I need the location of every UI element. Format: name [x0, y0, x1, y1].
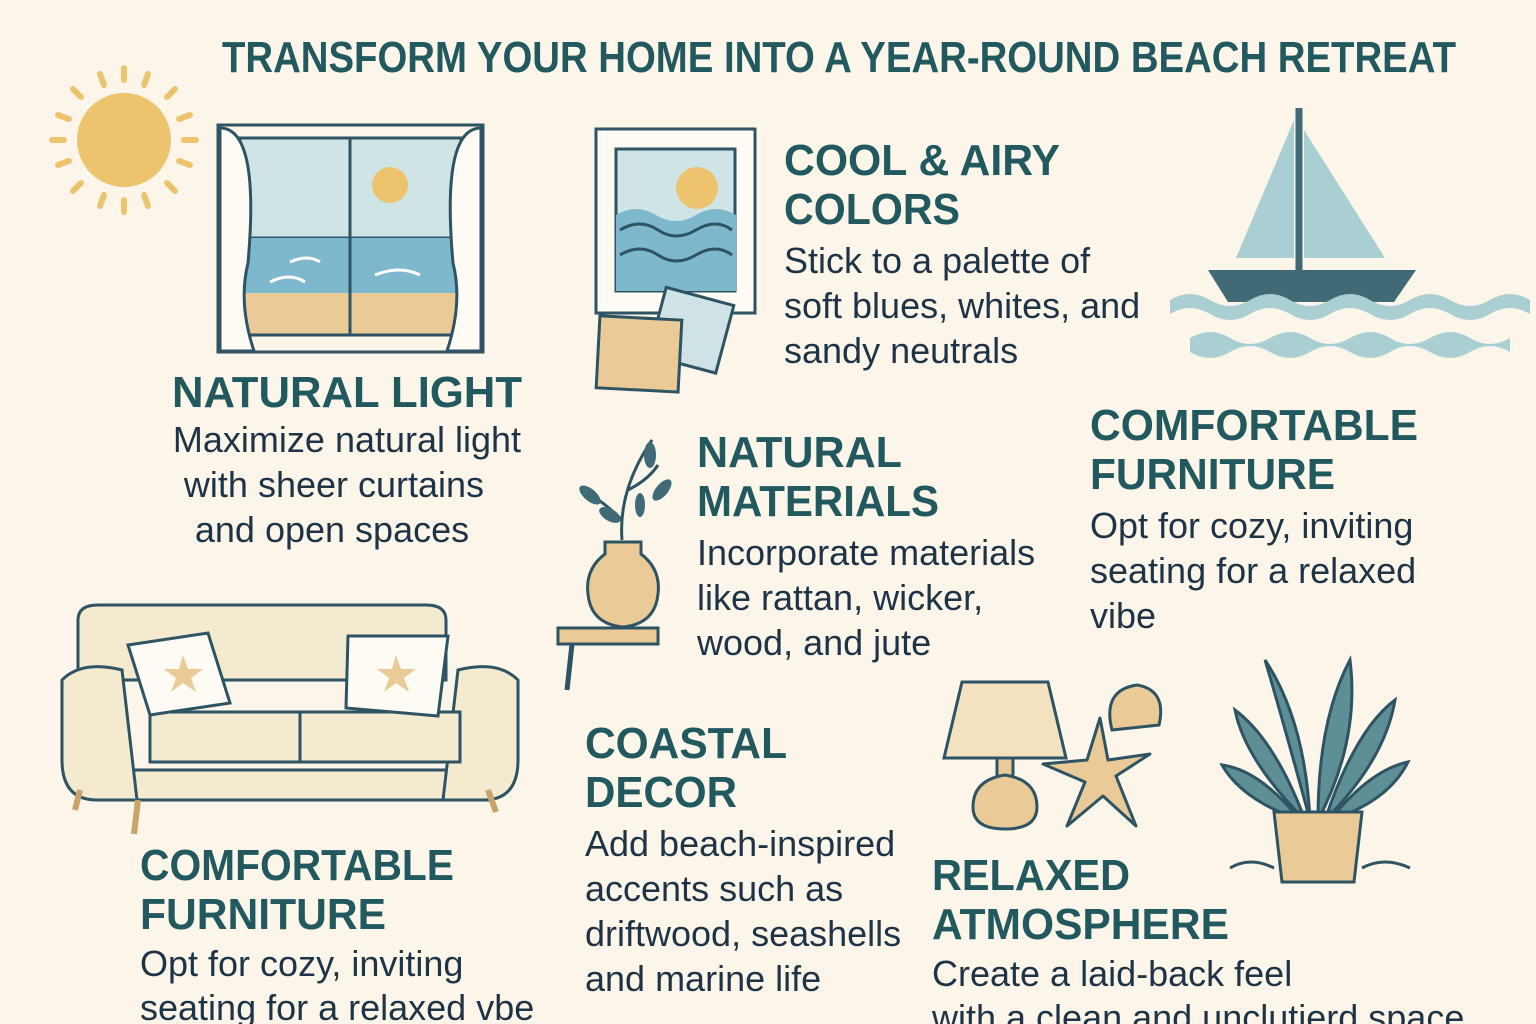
icon: sun	[52, 68, 196, 212]
text: comfortable furniture left	[140, 943, 534, 1024]
text: natural light: and open spaces	[195, 509, 469, 550]
text: comfortable furniture right: seating for a relaxed	[1090, 550, 1416, 591]
text: natural materials: Incorporate materials	[697, 532, 1035, 573]
text: coastal decor: and marine life	[585, 958, 821, 999]
heading: natural materials	[697, 428, 939, 526]
text: comfortable furniture right: vibe	[1090, 595, 1156, 636]
icon: vase with plant on shelf	[558, 440, 675, 690]
heading: comfortable furniture right: FURNITURE	[1090, 450, 1335, 499]
heading: natural materials: MATERIALS	[697, 477, 939, 526]
heading: cool & airy colors	[784, 136, 1060, 234]
icon: sofa	[62, 605, 518, 834]
heading: comfortable furniture right: COMFORTABLE	[1090, 401, 1418, 450]
heading: relaxed atmosphere	[932, 851, 1229, 949]
text: natural light: Maximize natural light	[173, 419, 521, 460]
text: cool & airy: soft blues, whites, and	[784, 285, 1140, 326]
icon: framed art with swatches	[596, 129, 755, 392]
text: coastal decor: driftwood, seashells	[585, 913, 901, 954]
text: natural light: with sheer curtains	[183, 464, 484, 505]
text: cool & airy: Stick to a palette of	[784, 240, 1091, 281]
text: natural materials: wood, and jute	[696, 622, 931, 663]
text: comfortable furniture right: Opt for cozy, inviting	[1090, 505, 1413, 546]
heading: coastal decor: COASTAL	[585, 719, 787, 768]
text: natural light	[173, 419, 521, 550]
heading: comfortable furniture left	[140, 841, 454, 939]
heading: relaxed atmosphere: RELAXED	[932, 851, 1130, 900]
text: coastal decor: Add beach-inspired	[585, 823, 895, 864]
heading: comfortable furniture left: COMFORTABLE	[140, 841, 454, 890]
icon: window with beach view	[218, 125, 483, 352]
heading: comfortable furniture right	[1090, 401, 1418, 499]
text: coastal decor: accents such as	[585, 868, 843, 909]
heading: relaxed atmosphere: ATMOSPHERE	[932, 900, 1229, 949]
heading: coastal decor: DECOR	[585, 768, 737, 817]
icon: potted plant	[1222, 660, 1410, 882]
heading: coastal decor	[585, 719, 787, 817]
text: natural materials: like rattan, wicker,	[697, 577, 983, 618]
text: comfortable furniture right	[1090, 505, 1416, 636]
text: cool & airy: sandy neutrals	[784, 330, 1018, 371]
heading: natural materials: NATURAL	[697, 428, 902, 477]
text: natural materials	[696, 532, 1035, 663]
heading: comfortable furniture left: FURNITURE	[140, 890, 386, 939]
text: coastal decor	[585, 823, 901, 999]
heading: cool & airy colors: COLORS	[784, 185, 960, 234]
text: comfortable furniture left: Opt for cozy, inviting	[140, 943, 463, 984]
icon: lamp, starfish and shell	[944, 682, 1161, 829]
heading: cool & airy colors: COOL & AIRY	[784, 136, 1060, 185]
text: cool & airy	[784, 240, 1140, 371]
icon: sailboat	[1170, 108, 1530, 358]
text: relaxed atmosphere	[931, 953, 1464, 1024]
heading: natural light: NATURAL LIGHT	[172, 368, 522, 417]
text: relaxed atmosphere: Create a laid-back feel	[932, 953, 1292, 994]
